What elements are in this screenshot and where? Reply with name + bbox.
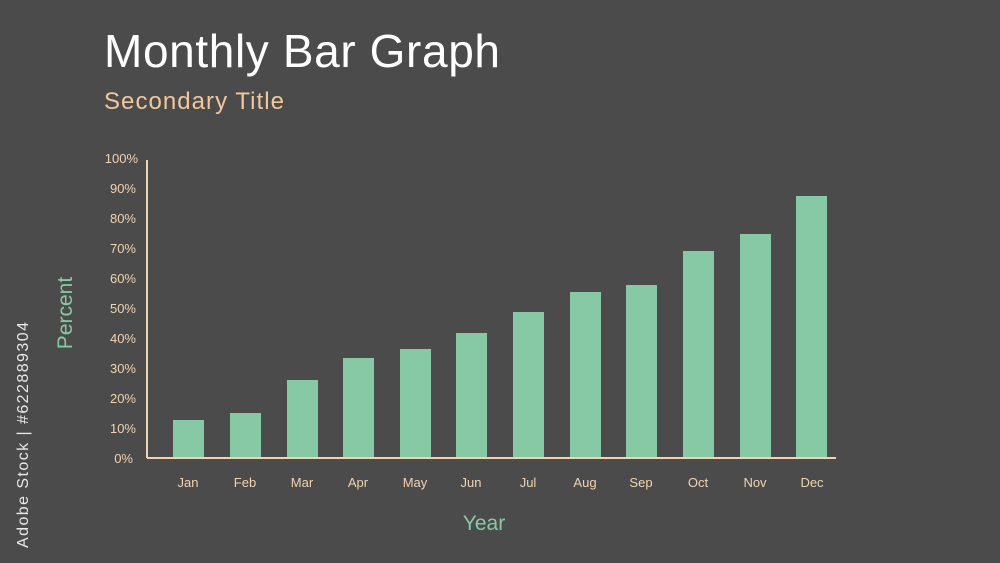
x axis labels: Jul	[520, 475, 536, 490]
y axis labels: 0%	[114, 451, 133, 466]
x axis labels: Jan	[178, 475, 198, 490]
title: Monthly Bar Graph	[104, 25, 500, 77]
x axis labels: Aug	[573, 475, 597, 490]
x axis labels: May	[403, 475, 428, 490]
y axis labels: 90%	[110, 181, 136, 196]
x axis labels: Feb	[234, 475, 256, 490]
secondary title: Secondary Title	[104, 88, 284, 115]
x axis labels: Sep	[629, 475, 653, 490]
y axis labels: 30%	[110, 361, 136, 376]
y axis labels: 100%	[105, 151, 138, 166]
y axis labels: 10%	[110, 421, 136, 436]
y axis labels: 40%	[110, 331, 136, 346]
x axis labels: Oct	[688, 475, 708, 490]
x axis labels: Jun	[461, 475, 481, 490]
y axis labels	[105, 151, 138, 466]
y axis labels: 80%	[110, 211, 136, 226]
x axis labels: Dec	[800, 475, 824, 490]
y axis labels: 70%	[110, 241, 136, 256]
x axis labels: Apr	[348, 475, 369, 490]
y axis labels: 20%	[110, 391, 136, 406]
y axis labels: 50%	[110, 301, 136, 316]
watermark id: Adobe Stock | #622889304	[15, 322, 32, 548]
axes	[147, 160, 836, 458]
x axis labels	[178, 475, 824, 490]
y axis labels: 60%	[110, 271, 136, 286]
bars	[173, 196, 827, 458]
x axis labels: Nov	[743, 475, 767, 490]
x axis labels: Mar	[291, 475, 314, 490]
x axis title: Year	[463, 512, 505, 535]
y axis title: Percent	[54, 277, 77, 349]
